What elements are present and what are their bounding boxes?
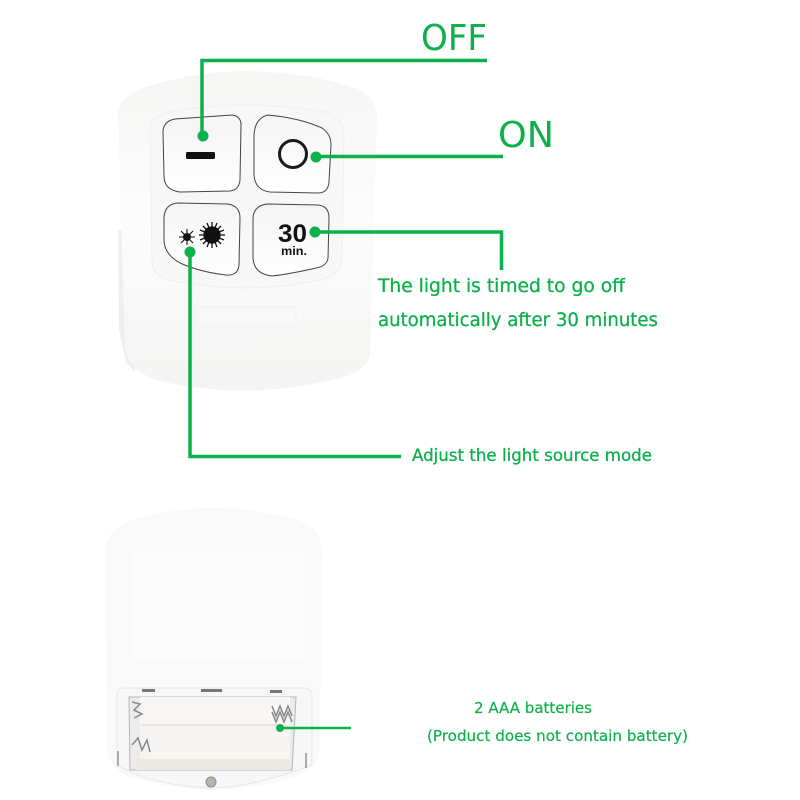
device: front with four buttons	[118, 71, 377, 391]
screw	[206, 777, 216, 787]
battery compartment	[117, 688, 312, 788]
battery clips	[132, 702, 292, 752]
callout: on	[310, 115, 554, 162]
button: on	[254, 115, 331, 193]
label: 30 min.: min.	[281, 244, 307, 258]
text: timer description: The light is timed to go off	[377, 275, 626, 297]
label: OFF: OFF	[421, 18, 487, 59]
callout: timer	[310, 226, 658, 331]
callout: light mode	[184, 246, 652, 466]
label: light mode: Adjust the light source mode	[412, 446, 652, 466]
button: off	[163, 115, 241, 192]
text: timer description	[377, 275, 658, 331]
label: 30 min.: 30	[278, 220, 307, 248]
callout: batteries	[276, 699, 688, 745]
text: timer description: automatically after 30 minutes	[378, 309, 658, 331]
icon: circle	[280, 140, 306, 168]
label: ON: ON	[498, 115, 554, 156]
device: back with battery compartment	[105, 508, 322, 790]
text: battery note: (Product does not contain battery)	[427, 727, 688, 745]
text: battery note: 2 AAA batteries	[474, 699, 592, 717]
button: brightness	[164, 203, 240, 275]
text: battery note	[427, 699, 688, 745]
icon: minus	[186, 152, 215, 159]
icon: small sun	[179, 229, 195, 245]
icon: large sun	[199, 222, 225, 248]
button: 30 minute timer	[253, 204, 329, 276]
callout: off	[198, 18, 487, 142]
